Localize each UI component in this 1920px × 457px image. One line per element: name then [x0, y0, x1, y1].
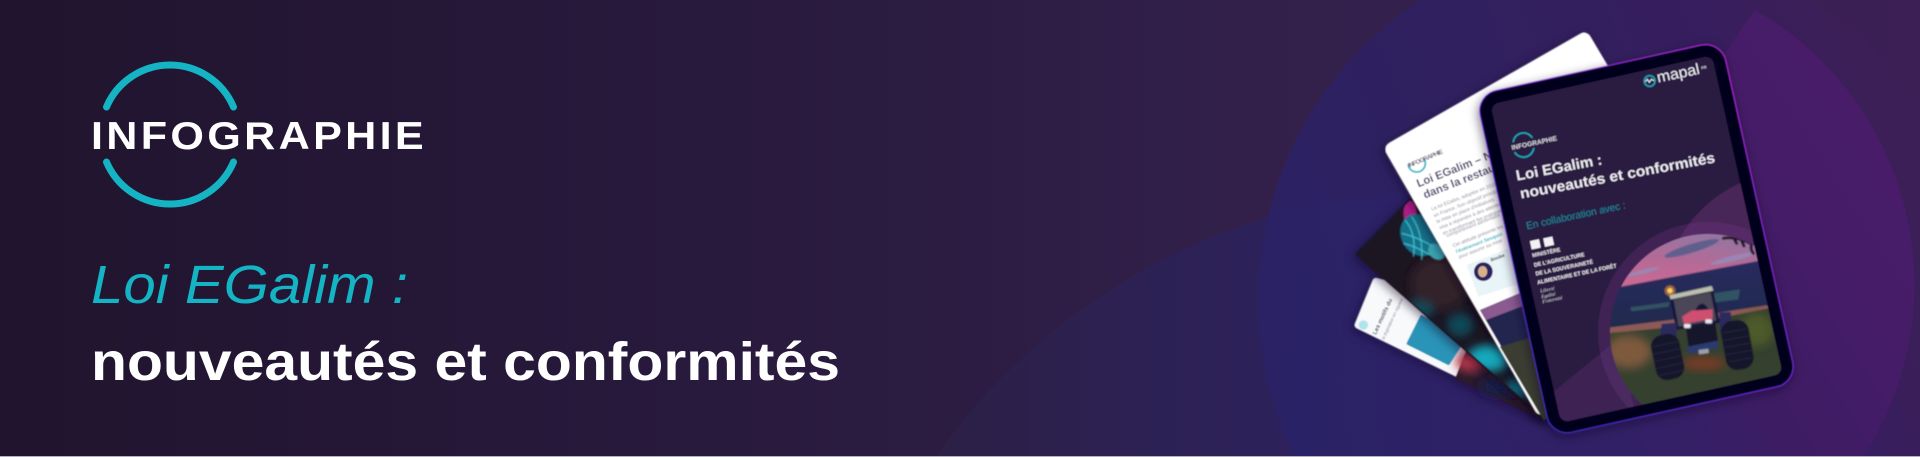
tablet logo word: INFOGRAPHIE — [1511, 135, 1558, 152]
screen background — [1492, 56, 1782, 422]
article body: Cet attitude présente les — [1452, 224, 1505, 249]
photo warm grass — [1605, 335, 1652, 368]
tractor plate — [1698, 349, 1709, 354]
logo: INFOGRAPHIE — [91, 65, 427, 204]
screen shape: lens — [1680, 182, 1782, 393]
photo tree branch — [1723, 237, 1753, 253]
screen photo: tractor at dusk — [1609, 233, 1782, 406]
tablet screen — [1492, 56, 1782, 422]
tractor lights — [1684, 319, 1712, 328]
screen shape: wedge — [1553, 346, 1634, 422]
photo meadow — [1630, 289, 1740, 311]
ministry name: MINISTÈRE — [1531, 245, 1561, 259]
photo green shrubs — [1740, 313, 1773, 347]
tablet — [1471, 43, 1796, 440]
ministry name: ALIMENTAIRE ET DE LA FORÊT — [1536, 262, 1618, 286]
tractor left wheel — [1650, 334, 1685, 380]
card title: Les motifs du — [1372, 298, 1394, 336]
article body: en France. Son objectif principal — [1433, 188, 1501, 219]
card: back white page — [1358, 282, 1573, 421]
article logo ring — [1408, 155, 1425, 172]
tractor bumper — [1687, 341, 1718, 354]
photo sunset lamp — [1665, 285, 1675, 296]
tractor cab — [1672, 291, 1718, 328]
photo field band — [1600, 305, 1773, 335]
heading: Loi EGalim: Loi EGalim : — [91, 255, 408, 315]
logo word: INFOGRAPHIE — [91, 115, 427, 158]
ministry emblem — [1530, 236, 1554, 250]
tablet logo arcs — [1513, 133, 1534, 157]
tablet title: nouveautés et conformités — [1519, 150, 1716, 203]
article author panel — [1467, 248, 1520, 297]
document mockups — [1350, 32, 1796, 440]
tablet infographic logo — [1511, 133, 1558, 157]
article body: l'évènement Sesquoi — [1455, 231, 1504, 255]
mapal word: mapal — [1655, 61, 1701, 87]
tractor right wheel — [1720, 320, 1754, 370]
article picture strip — [1480, 292, 1600, 421]
logo arcs — [106, 65, 234, 204]
article body: la mise en place d'initiatives — [1436, 197, 1496, 225]
heading: nouveautés et conformités: nouveautés et conformités — [91, 332, 840, 392]
article logo white gap — [1402, 143, 1442, 166]
article title: Loi EGalim – Nouveautés — [1415, 129, 1546, 190]
article logo — [1402, 143, 1444, 172]
ministry name: DE L'AGRICULTURE — [1533, 252, 1585, 269]
mapal icon — [1644, 76, 1655, 86]
card text: la législation en vigueur — [1380, 297, 1404, 340]
mapal logo — [1644, 61, 1707, 87]
card: white article page — [1393, 40, 1707, 421]
ministry name — [1531, 245, 1618, 286]
article body — [1431, 181, 1505, 261]
screen shape: ring — [1598, 222, 1782, 409]
photo sky — [1620, 233, 1759, 288]
article body: comportement alimentaire — [1446, 212, 1502, 239]
bottom edge line — [0, 456, 1920, 457]
republic motto — [1539, 287, 1564, 305]
background shape: magenta lens — [1620, 10, 1914, 457]
photo ground glow — [1680, 357, 1727, 370]
background circle: large blue — [1258, 0, 1920, 457]
tractor fenders — [1660, 322, 1678, 338]
article title: dans la restauration — [1422, 151, 1526, 201]
tractor — [1649, 286, 1755, 382]
card: dark picture page — [1352, 196, 1548, 424]
tablet collaboration text: En collaboration avec : — [1525, 200, 1627, 232]
article author name: Bouba — [1490, 252, 1506, 263]
tablet body — [1476, 41, 1797, 437]
background circle: lower blue — [936, 190, 1920, 457]
tractor roof — [1669, 286, 1713, 299]
photo grass — [1610, 308, 1782, 406]
republic motto: Fraternité — [1541, 296, 1564, 305]
card icon — [1359, 320, 1368, 330]
article body: pour assurer sa mise — [1458, 238, 1504, 261]
article body: La loi EGalim, adoptée en 2018 — [1431, 181, 1498, 213]
mapal superscript: FR — [1701, 64, 1707, 70]
article logo word: INFOGRAPHIE — [1407, 148, 1444, 170]
card picture: worker with hairnet — [1392, 201, 1532, 398]
tablet title: Loi EGalim : — [1515, 153, 1604, 185]
card picture strip — [1455, 333, 1573, 421]
republic motto: Liberté — [1539, 287, 1556, 295]
photo clouds — [1628, 238, 1753, 277]
tractor driver — [1695, 304, 1708, 311]
article author avatar — [1474, 262, 1493, 281]
card blue panel — [1408, 317, 1463, 363]
ministry name: DE LA SOUVERAINETÉ — [1535, 258, 1594, 278]
tractor grille — [1686, 323, 1718, 347]
article body: visa à répondre à des attentes — [1439, 201, 1504, 231]
photo hills — [1610, 258, 1768, 327]
republic motto: Égalité — [1540, 291, 1557, 300]
article body: en transformant les pratiques — [1442, 207, 1505, 237]
tractor hood — [1682, 309, 1713, 324]
